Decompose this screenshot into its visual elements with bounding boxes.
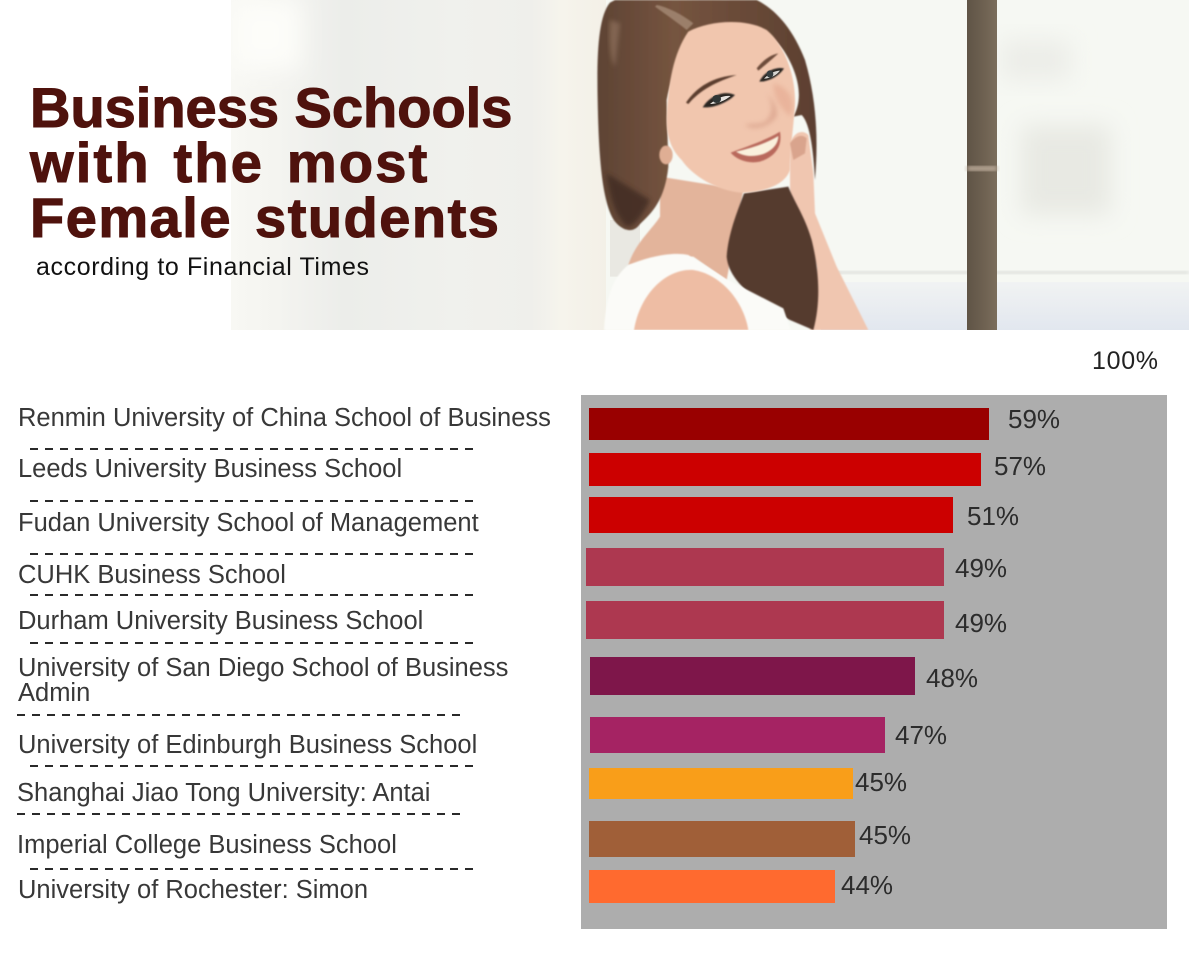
label: Imperial: Imperial College Business School: [17, 831, 397, 859]
teeth: [736, 136, 778, 156]
label: Fudan: Fudan University School of Management: [18, 509, 479, 537]
subtitle: according to Financial Times: [36, 253, 370, 281]
hair upper: [597, 0, 817, 230]
school labels: [17, 404, 551, 904]
title: with the most: [30, 131, 429, 194]
bar: Leeds 57%: [589, 453, 981, 486]
bar: Durham 49%: [586, 601, 944, 639]
title: Female students: [30, 186, 500, 249]
eye left: [703, 93, 735, 107]
bar: Edinburgh 47%: [590, 717, 885, 753]
value: 57%: 57%: [994, 451, 1046, 481]
neck: [628, 177, 743, 280]
value: 47%: 47%: [895, 720, 947, 750]
label: Edinburgh: University of Edinburgh Business School: [18, 731, 477, 759]
title: [29, 76, 512, 249]
mouth: [731, 132, 781, 162]
bar: San Diego 48%: [590, 657, 915, 695]
label: CUHK: CUHK Business School: [18, 561, 286, 589]
bar: Rochester 44%: [589, 870, 835, 903]
eye right: [759, 68, 784, 82]
value: 48%: 48%: [926, 663, 978, 693]
label: San Diego: University of San Diego School of Business: [18, 654, 508, 682]
bar: Shanghai Jiao Tong 45%: [589, 768, 853, 799]
value: 44%: 44%: [841, 870, 893, 900]
gap behind neck: [610, 220, 640, 277]
white top: [604, 254, 791, 330]
bar: Imperial 45%: [589, 821, 855, 857]
value: 59%: 59%: [1008, 404, 1060, 434]
scale label: 100%: 100%: [1092, 347, 1159, 375]
label: Renmin: Renmin University of China School of Business: [18, 404, 551, 432]
hair shadow: [607, 173, 650, 227]
hair lower: [727, 187, 818, 330]
value: 49%: 49%: [955, 553, 1007, 583]
brow right: [757, 53, 778, 71]
label: Rochester: University of Rochester: Simon: [18, 876, 368, 904]
panel: chart background: [581, 395, 1167, 929]
face: [667, 22, 795, 193]
bar: Fudan 51%: [589, 497, 953, 533]
far hand and arm: [790, 132, 868, 330]
label: Leeds: Leeds University Business School: [18, 455, 402, 483]
bar chart: [586, 404, 1060, 903]
bar: Renmin 59%: [589, 408, 989, 440]
title: Business Schools: [30, 76, 512, 139]
label: San Diego: [18, 654, 508, 707]
right cheek shade: [773, 83, 793, 117]
bar: CUHK 49%: [586, 548, 944, 586]
value: 45%: 45%: [855, 767, 907, 797]
label: Durham: Durham University Business School: [18, 607, 423, 635]
ear: [659, 146, 673, 164]
value: 49%: 49%: [955, 608, 1007, 638]
label: San Diego: Admin: [18, 679, 90, 707]
hand shadow: [790, 136, 807, 160]
header photo: [231, 0, 1189, 330]
value: 45%: 45%: [859, 820, 911, 850]
value: 51%: 51%: [967, 501, 1019, 531]
label: Shanghai Jiao Tong: Shanghai Jiao Tong University: Antai: [17, 779, 430, 807]
hair highlight: [609, 20, 620, 67]
brow left: [686, 75, 737, 104]
nose: [745, 93, 777, 128]
woman portrait: [597, 0, 868, 330]
shoulder: [634, 270, 748, 330]
